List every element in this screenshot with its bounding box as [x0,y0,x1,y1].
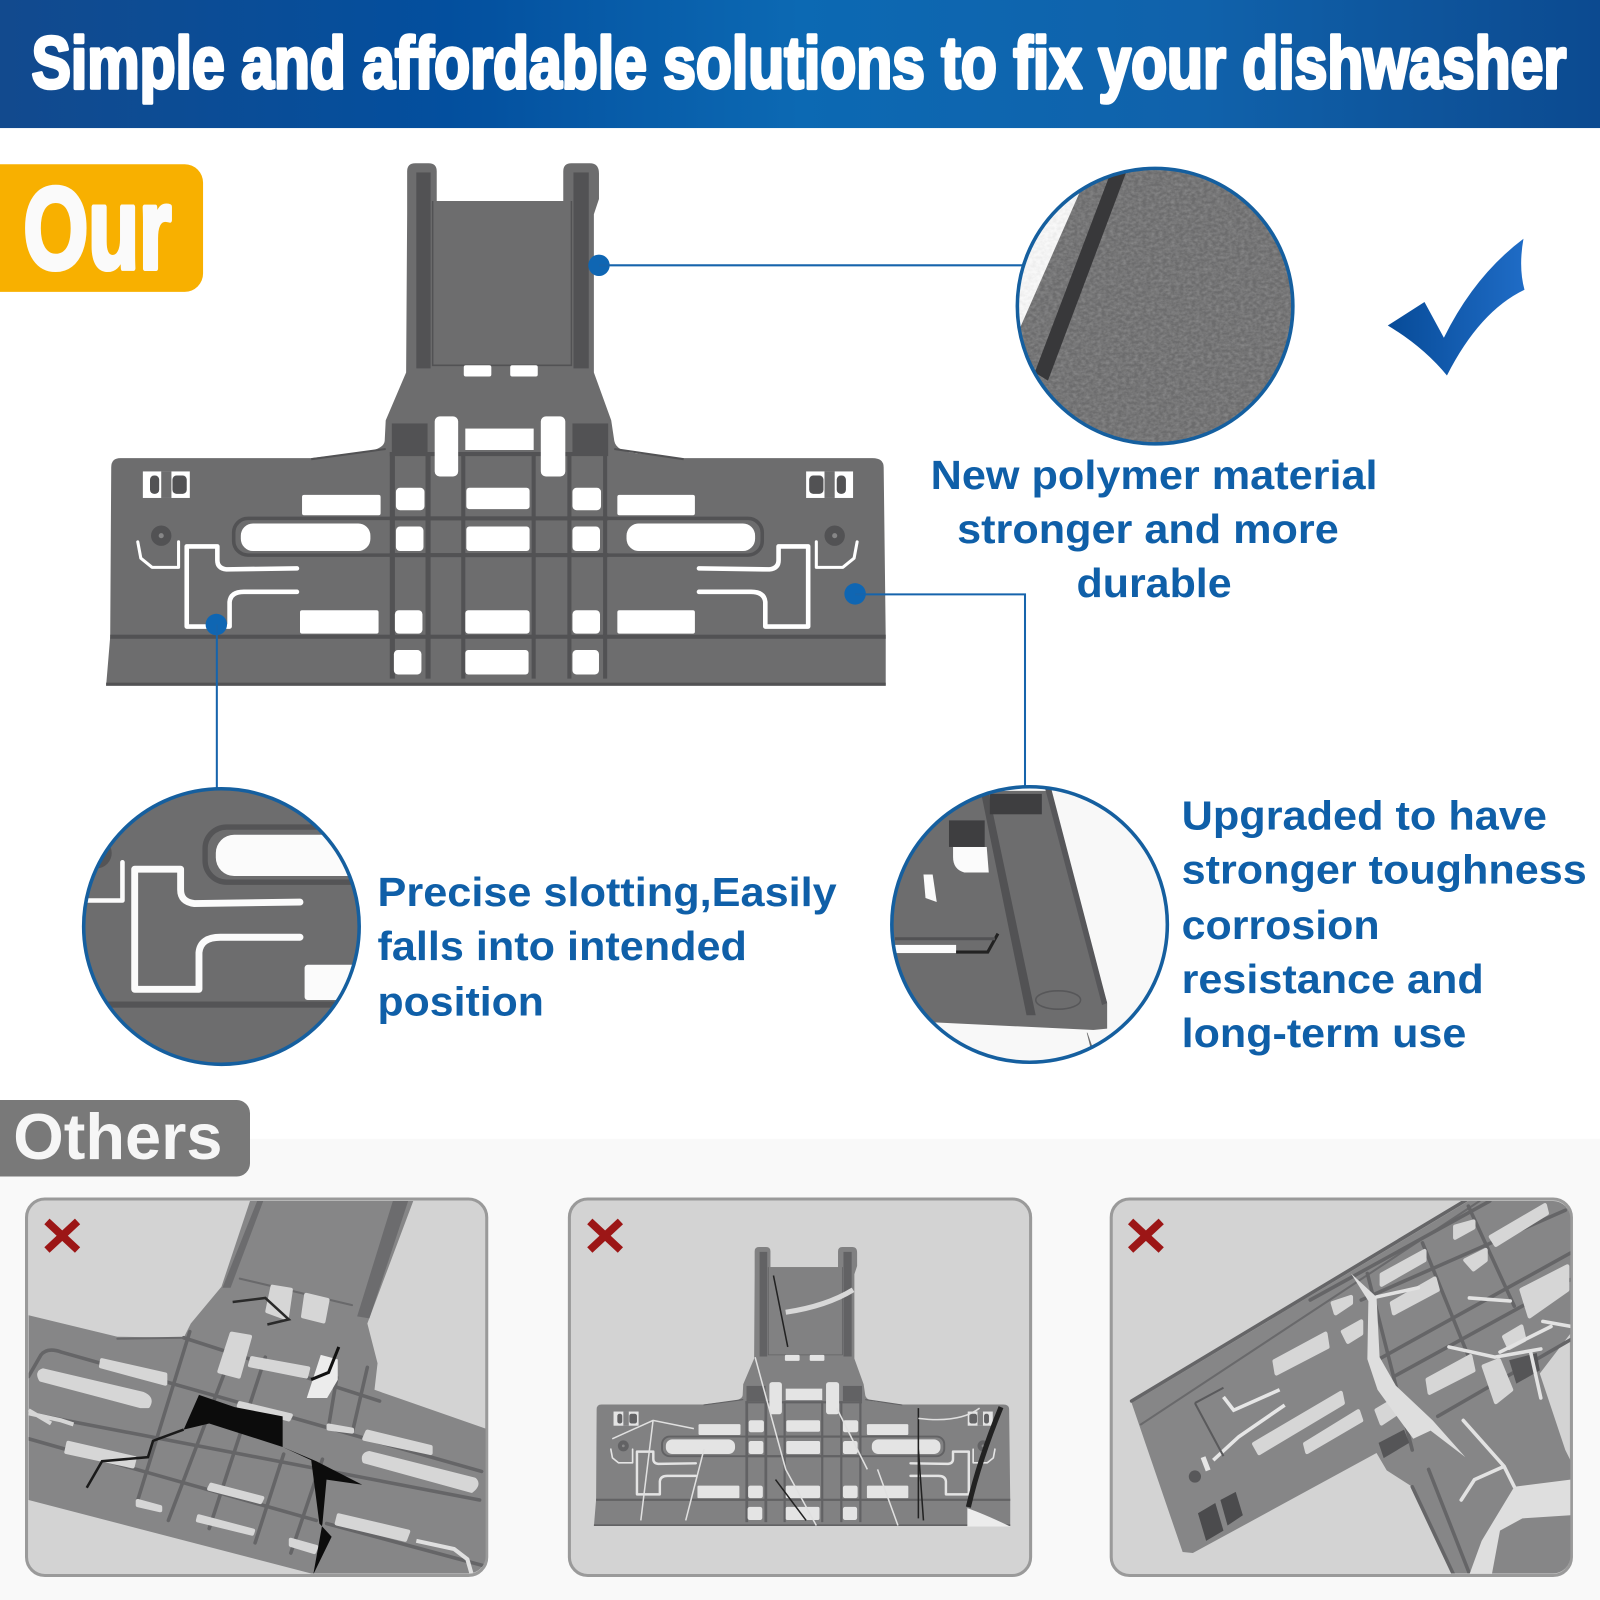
text: toughness: stronger toughness [1182,847,1587,893]
main product: upper rack bracket [106,163,886,686]
text: polymer material: stronger and more [957,506,1339,552]
text: toughness [1182,793,1587,1056]
zoom circle: precise slotting [82,787,361,1066]
text: precise slotting: falls into intended [378,923,747,969]
tilted bracket body [29,1201,486,1573]
text: toughness: corrosion [1182,902,1380,948]
connector: toughness callout [844,583,1025,788]
connector: material callout [588,255,1023,276]
icon: red cross [590,1221,620,1250]
panel: competitor bracket cracked [569,1199,1031,1576]
text: toughness: long-term use [1182,1010,1466,1056]
panel: competitor bracket fractured [1111,1199,1571,1576]
text: polymer material: durable [1077,560,1232,606]
header banner [0,0,1600,128]
panel: competitor bracket snapped [27,1199,487,1576]
bottom comparison background band [0,1139,1600,1600]
connector: slotting callout [206,614,227,790]
check mark icon [1388,239,1524,376]
black fracture [184,1395,283,1447]
text: precise slotting: position [378,978,544,1024]
zoom circle: polymer material [1016,166,1295,446]
text: polymer material: New polymer material [931,452,1378,498]
icon: red cross [1131,1221,1161,1250]
diagonal bracket body [1132,1201,1570,1573]
badge: Others: Others [13,1100,222,1173]
text: precise slotting [378,869,837,1024]
badge: Our: Our [23,163,171,293]
text: precise slotting: Precise slotting,Easily [378,869,837,915]
text: polymer material [931,452,1378,606]
text: toughness: Upgraded to have [1182,793,1547,839]
icon: red cross [47,1221,78,1250]
white cracks [1351,1273,1465,1457]
zoom circle: toughness [888,784,1171,1065]
text: toughness: resistance and [1182,956,1484,1002]
